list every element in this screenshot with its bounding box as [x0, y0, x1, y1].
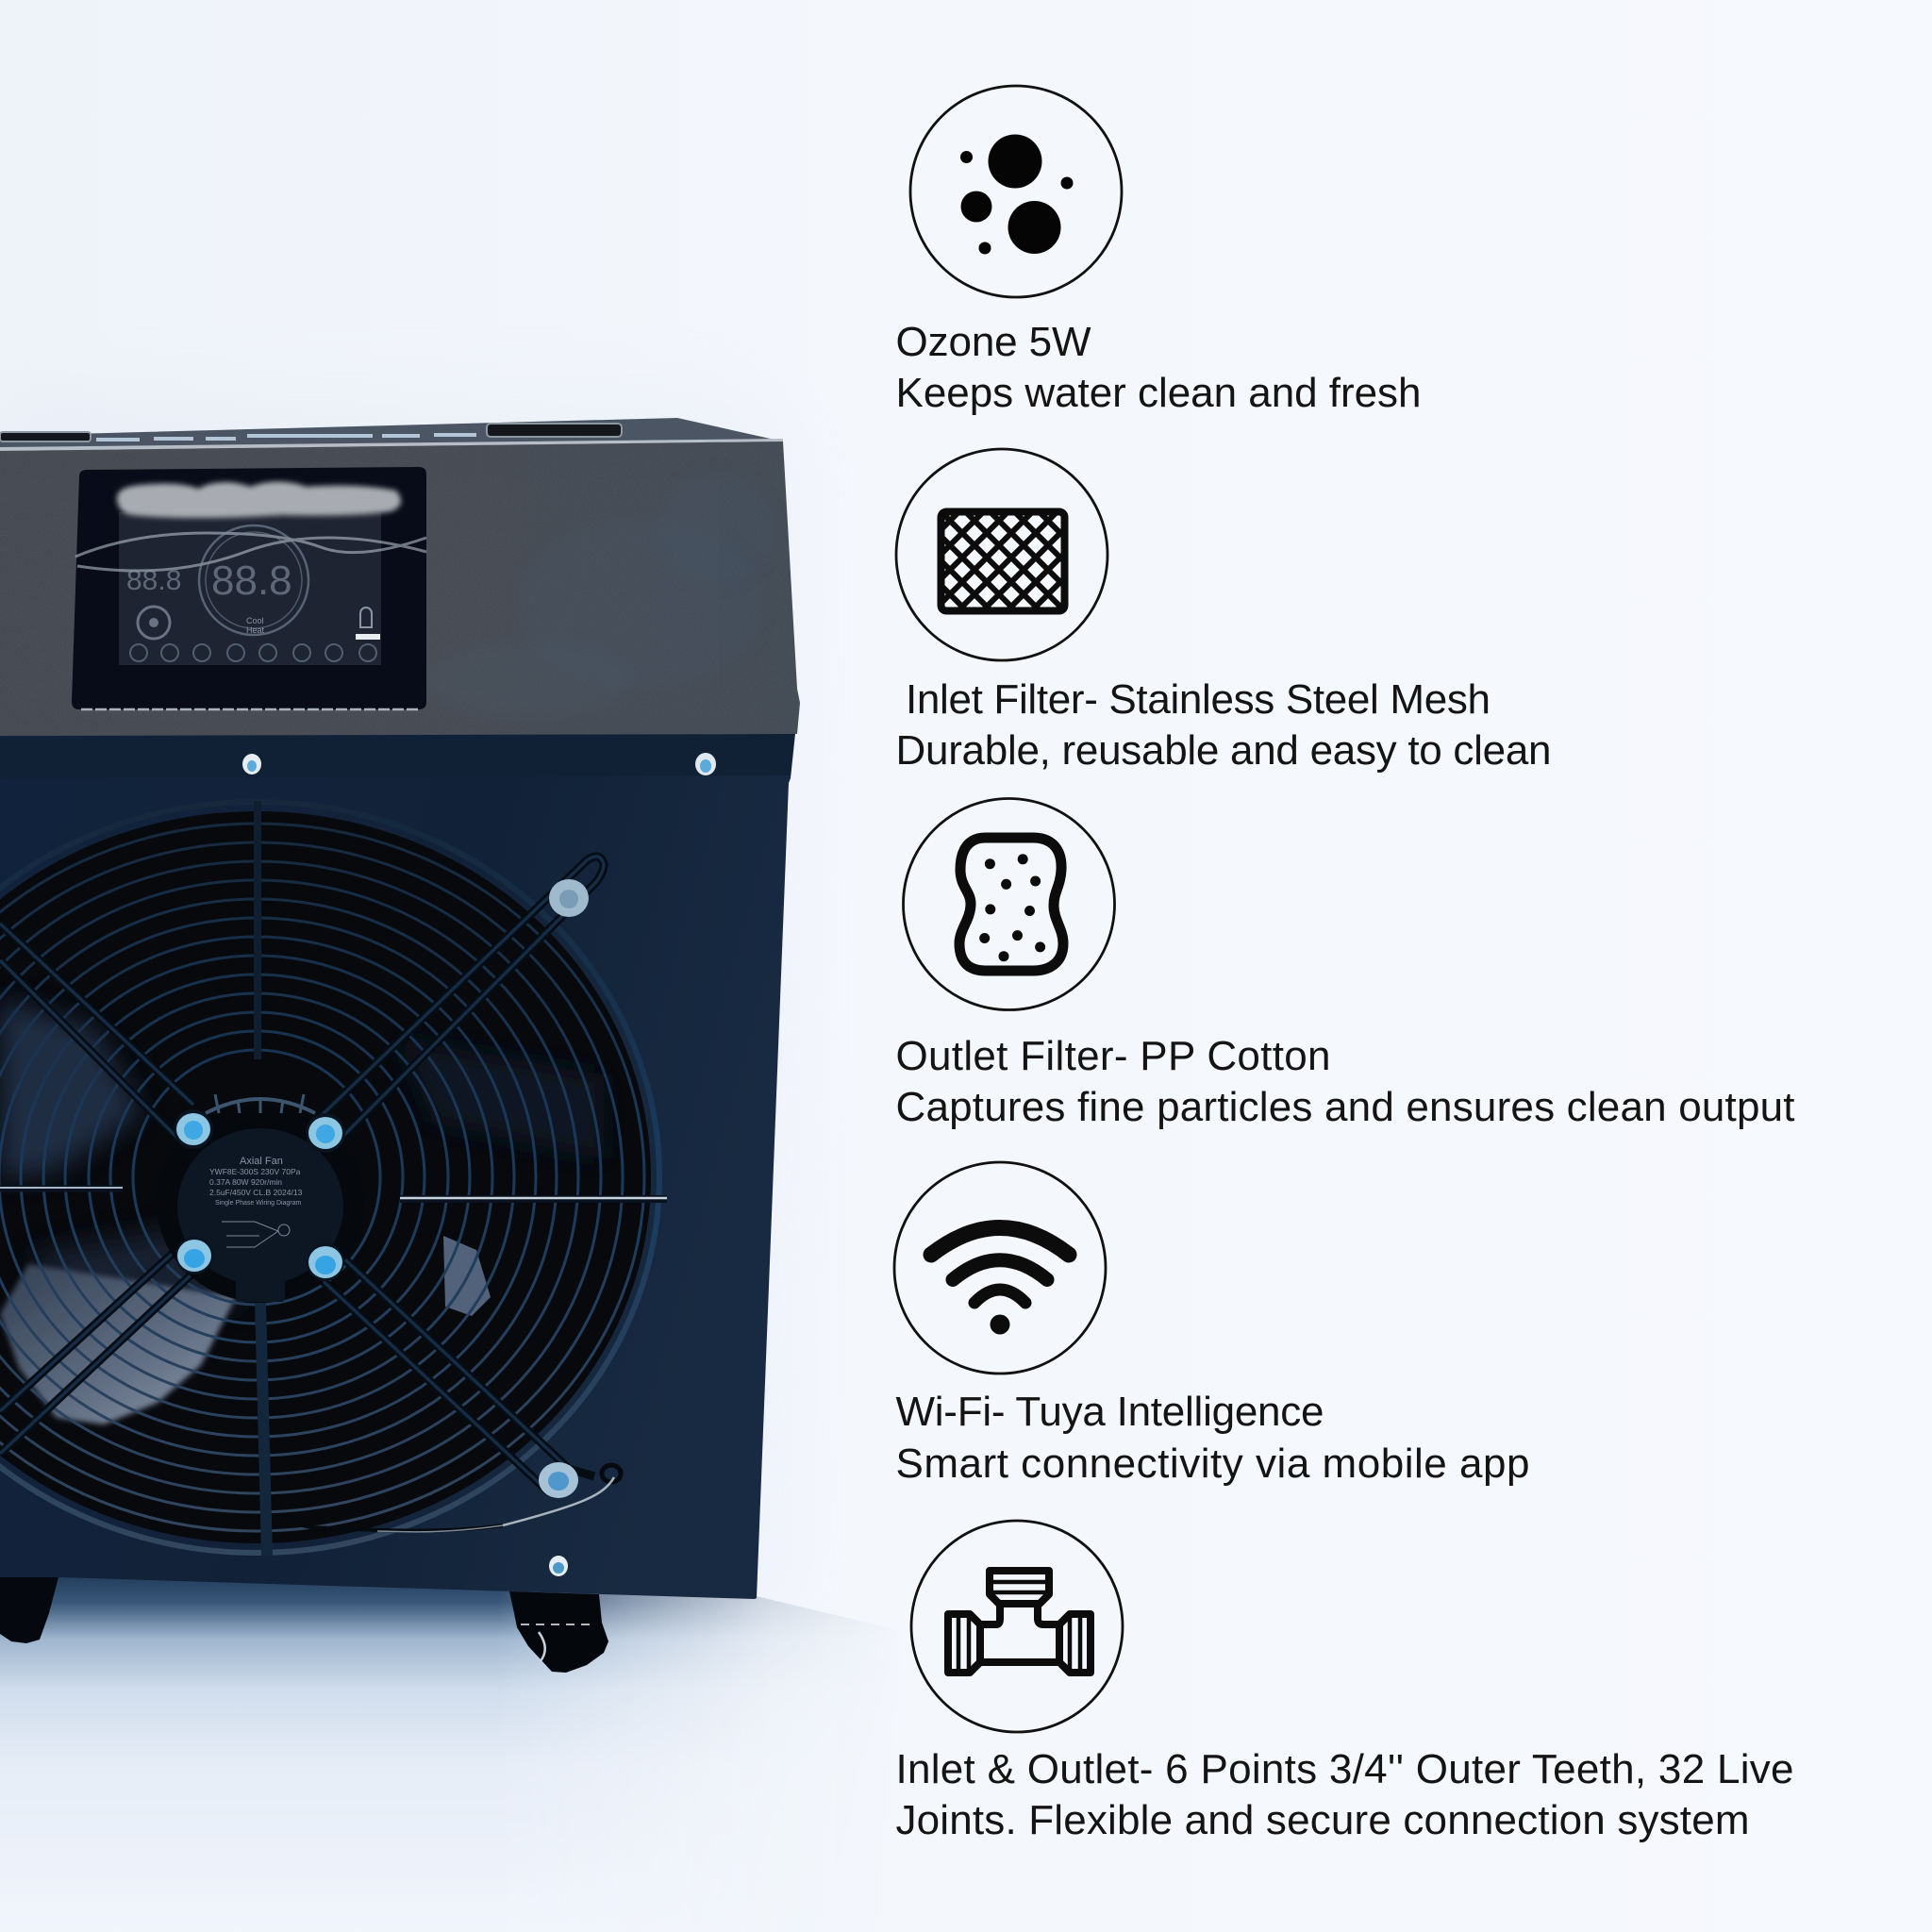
fan well [0, 811, 651, 1543]
machine glow [0, 396, 783, 1594]
control screen [72, 467, 426, 709]
grille rings [0, 802, 659, 1553]
text: wifi: Smart connectivity via mobile app [896, 1441, 1530, 1487]
icon: ozone bubbles [910, 86, 1122, 297]
feature: inlet filter [896, 449, 1551, 774]
LCD display: 88.8 [126, 565, 181, 596]
icon: steel mesh [896, 449, 1108, 660]
power wire [286, 1465, 621, 1532]
motor hub: Axial Fan [240, 1156, 283, 1167]
motor hub: YWF8E-300S 230V 70Pa [209, 1167, 301, 1176]
feature: connectors [896, 1521, 1794, 1843]
floor shadow [0, 1577, 858, 1819]
text: wifi: Wi-Fi- Tuya Intelligence [896, 1389, 1324, 1435]
screen glare [117, 481, 401, 518]
icon: wifi [894, 1162, 1106, 1374]
text: inlet filter: Inlet Filter- Stainless Steel Mesh [906, 676, 1491, 723]
text: ozone: Keeps water clean and fresh [896, 370, 1421, 416]
LCD display: Cool [246, 616, 264, 625]
body upper band [0, 734, 794, 778]
fan blades [0, 1000, 604, 1424]
motor hub: 2.5uF/450V CL.B 2024/13 [209, 1188, 303, 1197]
icon: tee pipe fitting [911, 1521, 1123, 1732]
LCD display [75, 512, 426, 665]
text: ozone: Ozone 5W [896, 319, 1091, 365]
LCD display: 88.8 [211, 558, 292, 604]
heat pump unit [0, 418, 802, 1673]
grey control panel [0, 441, 802, 741]
icon: sponge [904, 798, 1115, 1009]
hub bolts [174, 879, 589, 1498]
fan guard [0, 801, 667, 1556]
guard struts [0, 801, 667, 1556]
motor hub [157, 1094, 364, 1302]
motor hub: Single Phase Wiring Diagram [215, 1200, 302, 1207]
LCD display: Heat [246, 625, 265, 635]
text: connectors: Joints. Flexible and secure connection system [896, 1797, 1749, 1843]
text: inlet filter: Durable, reusable and easy to clean [896, 727, 1551, 774]
motor hub: 0.37A 80W 920r/min [209, 1177, 282, 1187]
feature: wifi [894, 1162, 1530, 1487]
text: outlet filter: Captures fine particles and ensures clean output [896, 1084, 1794, 1130]
panel screws [242, 753, 716, 1576]
top surface [0, 418, 783, 451]
castor wheels [0, 1574, 608, 1673]
text: outlet filter: Outlet Filter- PP Cotton [896, 1033, 1330, 1079]
text: connectors: Inlet & Outlet- 6 Points 3/4'' Outer Teeth, 32 Live [896, 1746, 1794, 1792]
navy body [0, 734, 795, 1599]
feature: ozone [896, 86, 1421, 416]
feature: outlet filter [896, 798, 1794, 1130]
